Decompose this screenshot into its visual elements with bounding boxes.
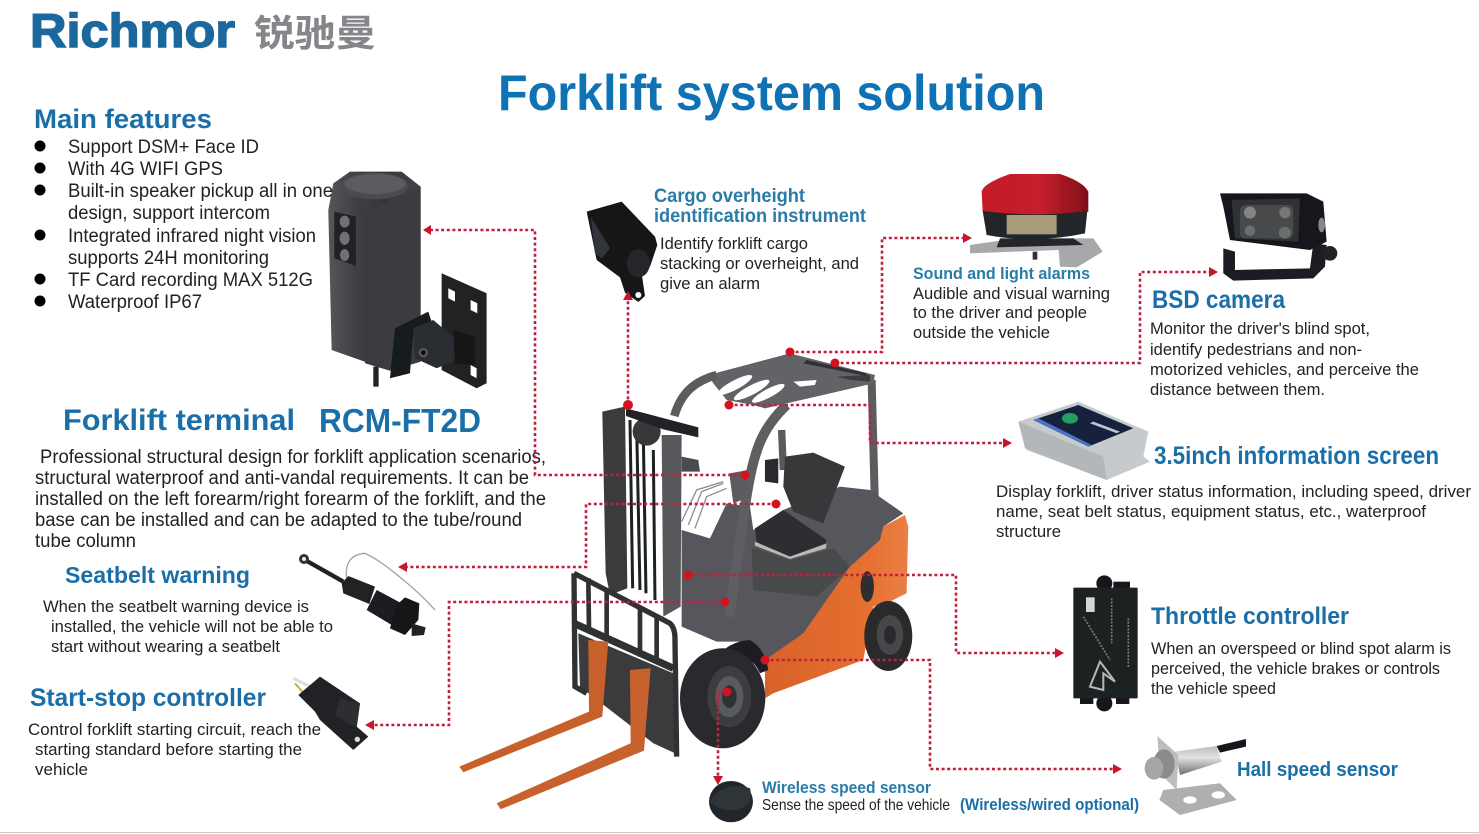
forklift: side vent (861, 571, 874, 602)
throttle description: the vehicle speed (1151, 679, 1276, 698)
feature list: Support DSM+ Face ID (68, 137, 259, 158)
forklift: seat trim (755, 542, 827, 559)
seatbelt description: installed, the vehicle will not be able to (51, 617, 333, 636)
screen description (996, 482, 1471, 541)
arrow: start-stop controller (365, 598, 730, 730)
bullets (34, 140, 46, 306)
heading: start-stop controller: Start-stop controller (30, 684, 266, 712)
start-stop description: starting standard before starting the (35, 740, 302, 759)
device: information screen (1018, 402, 1150, 480)
alarm description: to the driver and people (913, 303, 1087, 322)
BSD description: motorized vehicles, and perceive the (1150, 360, 1419, 379)
heading: cargo overheight: identification instrument (654, 206, 867, 227)
forklift: front pillar (729, 405, 787, 617)
arrow: information screen (724, 400, 1012, 448)
device: forklift terminal (328, 172, 487, 388)
feature list: Integrated infrared night vision (68, 226, 316, 247)
forklift: rear pillar (872, 380, 875, 507)
forklift: mirror (765, 458, 778, 483)
heading: main features: Main features (34, 104, 212, 134)
seatbelt description: start without wearing a seatbelt (51, 637, 280, 656)
hall speed sensor label: Hall speed sensor (1237, 759, 1398, 781)
forklift terminal description: tube column (35, 531, 136, 552)
cargo description (660, 234, 859, 293)
forklift terminal heading: Forklift terminal (63, 404, 295, 437)
heading: cargo overheight (654, 186, 867, 227)
start-stop description (28, 720, 321, 779)
forklift: roof guard (708, 353, 875, 408)
BSD camera (1150, 286, 1419, 399)
feature list: supports 24H monitoring (68, 248, 269, 269)
device: sound and light alarm (970, 174, 1103, 267)
device: start-stop relay (293, 677, 368, 750)
throttle description: When an overspeed or blind spot alarm is (1151, 639, 1451, 658)
BSD description: distance between them. (1150, 380, 1325, 399)
cargo description: Identify forklift cargo (660, 234, 808, 253)
logo: Richmor: 锐驰曼 (254, 13, 376, 54)
forklift terminal heading: RCM-FT2D (319, 402, 481, 439)
heading: throttle controller: Throttle controller (1151, 603, 1349, 630)
BSD description: Monitor the driver's blind spot, (1150, 319, 1370, 338)
device: BSD camera (1220, 193, 1337, 281)
logo: Richmor: Richmor (30, 4, 235, 57)
arrow: sound and light alarm (786, 233, 972, 356)
cargo description: give an alarm (660, 274, 760, 293)
alarm description (913, 284, 1110, 342)
heading: sound and light alarms: Sound and light alarms (913, 264, 1090, 283)
heading: cargo overheight: Cargo overheight (654, 186, 806, 207)
alarm description: outside the vehicle (913, 323, 1050, 342)
throttle description: perceived, the vehicle brakes or controls (1151, 659, 1440, 678)
seatbelt description (43, 597, 333, 656)
device: seatbelt warning (299, 553, 435, 636)
start-stop description: vehicle (35, 760, 88, 779)
arrow: wireless speed sensor (713, 688, 732, 785)
sound and light alarms (913, 264, 1110, 342)
throttle controller (1151, 603, 1451, 698)
throttle description (1151, 639, 1451, 698)
forklift terminal description (35, 447, 546, 552)
heading: seatbelt warning: Seatbelt warning (65, 562, 250, 588)
feature list: Waterproof IP67 (68, 292, 202, 313)
forklift illustration (459, 353, 912, 809)
forklift: rear wheel (864, 601, 912, 671)
forklift: fork carriage (574, 573, 677, 757)
forklift terminal description: structural waterproof and anti-vandal requirements. It can be (35, 468, 529, 489)
forklift: mast rails (602, 407, 700, 617)
start-stop controller (28, 684, 321, 779)
BSD description (1150, 319, 1419, 399)
forklift terminal heading (63, 402, 481, 439)
forklift: fork right (497, 668, 651, 809)
forklift: body (682, 487, 903, 660)
heading: information screen: 3.5inch information screen (1154, 442, 1439, 470)
feature list: design, support intercom (68, 203, 270, 224)
feature list: TF Card recording MAX 512G (68, 270, 313, 291)
feature list: With 4G WIFI GPS (68, 159, 223, 180)
start-stop description: Control forklift starting circuit, reach the (28, 720, 321, 739)
logo: Richmor (30, 4, 376, 57)
heading: wireless speed sensor: Wireless speed sensor (762, 778, 931, 797)
forklift: steering column (729, 470, 750, 503)
screen description: Display forklift, driver status information, including speed, driver (996, 482, 1471, 501)
feature list: Built-in speaker pickup all in one (68, 181, 333, 202)
arrow: throttle controller (684, 570, 1064, 658)
forklift: left arch (674, 375, 717, 416)
forklift: seat back (783, 453, 845, 523)
forklift: seat cushion (755, 510, 827, 557)
device: wireless speed sensor (709, 781, 753, 822)
screen description: structure (996, 522, 1061, 541)
alarm description: Audible and visual warning (913, 284, 1110, 303)
arrow: terminal (423, 225, 750, 480)
forklift: mid support (782, 430, 783, 470)
wireless description: Sense the speed of the vehicle (762, 797, 950, 814)
title: Forklift system solution (498, 65, 1045, 121)
wireless speed sensor (762, 778, 1139, 814)
feature list (68, 137, 333, 313)
device: cargo overheight instrument (587, 202, 657, 302)
forklift: orange counterweight (765, 515, 908, 698)
device: throttle controller (1073, 575, 1138, 711)
wireless or wired note: (Wireless/wired optional) (960, 795, 1139, 814)
arrow: hall speed sensor (760, 656, 1122, 774)
BSD description: identify pedestrians and non- (1150, 340, 1362, 359)
seatbelt warning (43, 562, 333, 656)
arrow: cargo instrument (623, 291, 633, 410)
cargo overheight (654, 186, 867, 293)
forklift terminal description: installed on the left forearm/right forearm of the forklift, and the (35, 489, 546, 510)
forklift: seat box (752, 547, 850, 597)
forklift: fork left (459, 640, 608, 772)
forklift: fender (715, 640, 768, 673)
arrow: BSD camera (830, 267, 1218, 368)
arrow: seatbelt warning (398, 500, 780, 572)
device: hall speed sensor (1145, 736, 1246, 815)
main features (34, 104, 333, 313)
cargo description: stacking or overheight, and (660, 254, 859, 273)
screen description: name, seat belt status, equipment status, etc., waterproof (996, 502, 1426, 521)
forklift: levers (682, 482, 727, 528)
heading: BSD camera: BSD camera (1152, 286, 1286, 314)
forklift: front wheel (680, 648, 765, 748)
information screen (996, 442, 1471, 541)
forklift terminal description: Professional structural design for forklift application scenarios, (40, 447, 546, 468)
seatbelt description: When the seatbelt warning device is (43, 597, 309, 616)
forklift terminal description: base can be installed and can be adapted to the tube/round (35, 510, 522, 531)
